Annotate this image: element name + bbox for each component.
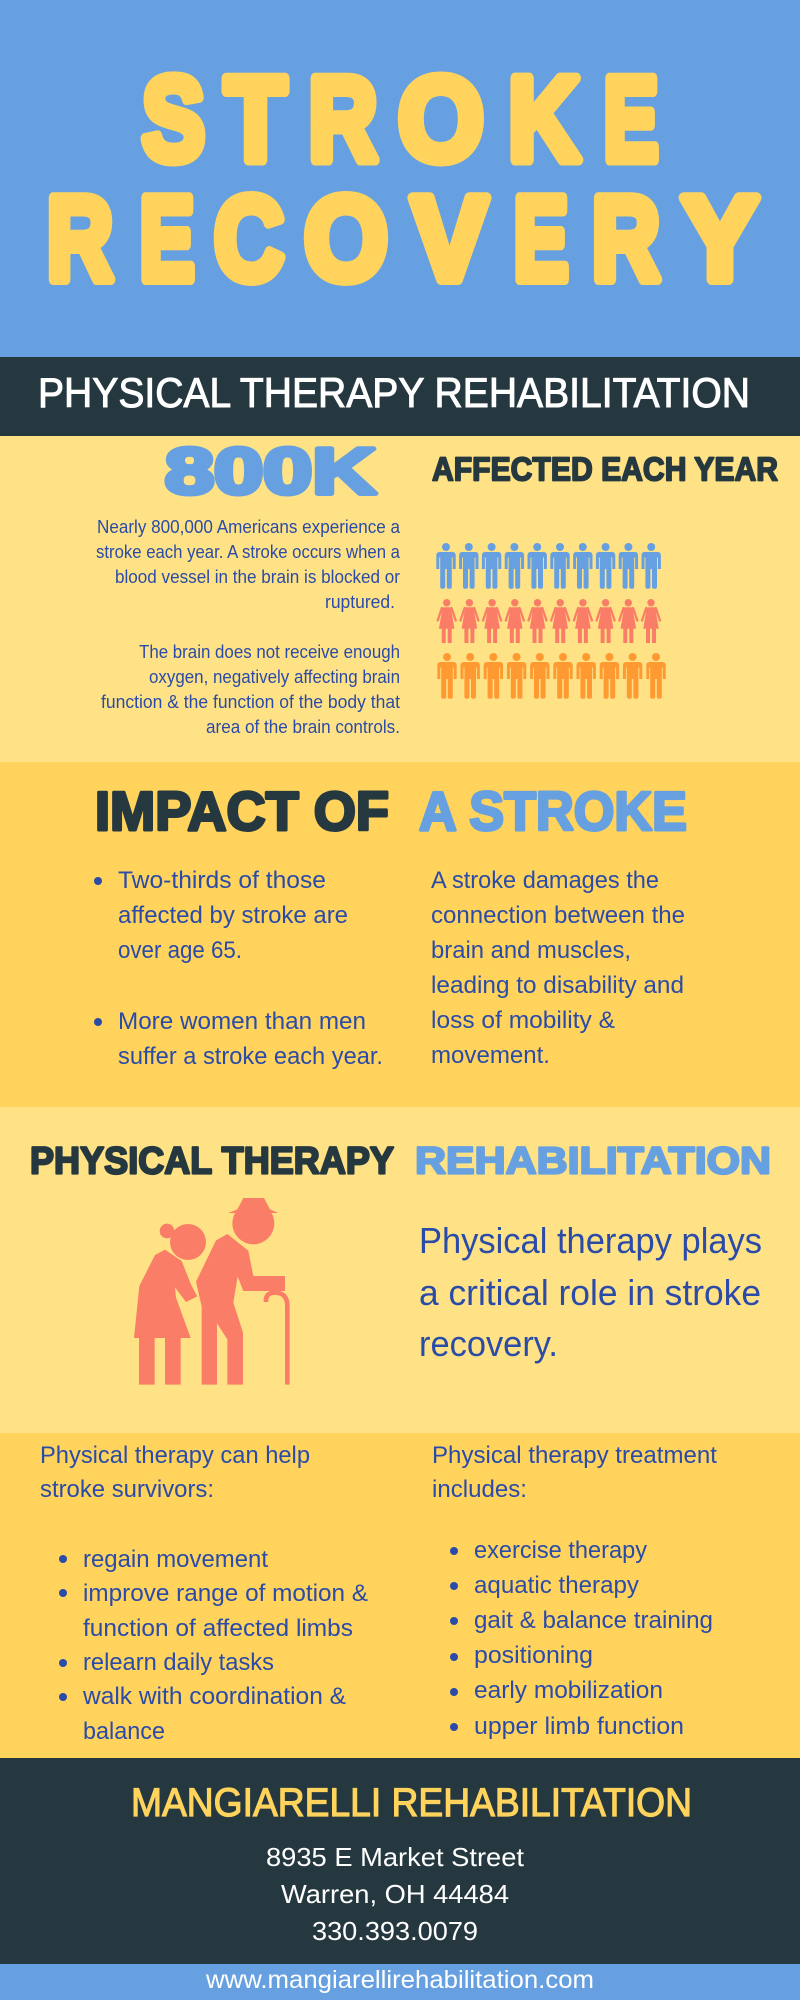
text block: critical role: a critical role in stroke [419,1272,761,1313]
text block: critical role [419,1220,762,1364]
text block: stroke explanation: oxygen, negatively affecting brain [149,667,400,687]
heading: physical therapy: PHYSICAL THERAPY [30,1140,394,1182]
left column: benefits for stroke survivors: balance [83,1718,165,1745]
address and phone: Warren, OH 44484 [281,1879,509,1909]
text block: stroke explanation: ruptured. [325,592,395,612]
title line: STROKE: O [398,54,484,186]
pictogram row: people, orange [437,653,666,699]
text block: stroke damage: loss of mobility & [431,1007,615,1034]
title line: RECOVERY: R [47,172,113,305]
left column: benefits for stroke survivors [40,1442,368,1745]
bullet list: who is affected: over age 65. [118,937,242,964]
title line: RECOVERY: O [304,172,388,305]
title line: STROKE: T [225,54,286,186]
text block: stroke explanation: stroke each year. A stroke occurs when a [96,542,401,562]
address and phone [266,1842,525,1946]
left column: benefits for stroke survivors: function of affected limbs [83,1615,353,1642]
text block: stroke explanation: blood vessel in the brain is blocked or [115,567,400,587]
heading: affected each year: AFFECTED EACH YEAR [432,450,778,488]
heading: a stroke: A STROKE [419,780,687,842]
left column: benefits for stroke survivors: regain movement [83,1546,268,1573]
heading: rehabilitation: REHABILITATION [415,1140,771,1182]
panel: website bar [0,1964,800,2000]
panel: how therapy helps [0,1433,800,1758]
heading: impact of: IMPACT OF [95,780,389,842]
icon: elderly couple with cane [134,1198,287,1385]
text block: stroke damage: leading to disability and [431,972,684,999]
title line: STROKE: K [508,53,580,186]
left column: benefits for stroke survivors: relearn daily tasks [83,1649,274,1676]
right column: treatment list: positioning [474,1642,593,1669]
text block: stroke explanation: function & the function of the body that [101,692,400,712]
title line: RECOVERY: R [592,172,660,305]
title line: RECOVERY: Y [682,171,758,305]
text block: stroke explanation: Nearly 800,000 Americans experience a [97,517,401,537]
text block: stroke damage: movement. [431,1042,550,1069]
text block: stroke damage: connection between the [431,902,685,929]
right column: treatment list: gait & balance training [474,1607,713,1634]
bullet list: who is affected: More women than men [118,1008,366,1035]
right column: treatment list: Physical therapy treatment [432,1442,717,1469]
address and phone: 8935 E Market Street [266,1842,525,1872]
text block: stroke explanation: The brain does not receive enough [139,642,400,662]
title line: RECOVERY: C [214,172,284,305]
text block: stroke damage: A stroke damages the [431,867,659,894]
big number: 800K [165,434,376,508]
text block: stroke explanation [96,517,401,737]
right column: treatment list: upper limb function [474,1713,684,1740]
text block: stroke damage: brain and muscles, [431,937,631,964]
bullet list: who is affected [94,867,383,1070]
left column: benefits for stroke survivors: stroke survivors: [40,1476,214,1503]
panel: physical therapy rehabilitation [0,1107,800,1433]
title line: RECOVERY [47,171,758,305]
title line: RECOVERY: E [140,171,194,305]
right column: treatment list: exercise therapy [474,1537,647,1564]
panel: contact footer [0,1758,800,1964]
bullet list: who is affected: affected by stroke are [118,902,348,929]
panel: impact of a stroke [0,762,800,1107]
left column: benefits for stroke survivors: walk with coordination & [82,1683,346,1710]
bullet list: who is affected: suffer a stroke each year. [118,1043,383,1070]
footer heading: MANGIARELLI REHABILITATION [131,1781,692,1825]
text block: stroke damage [431,867,685,1069]
title line: STROKE: S [142,52,205,186]
website url: www.mangiarellirehabilitation.com [205,1966,594,1994]
pictogram row: men, blue [436,543,661,589]
left column: benefits for stroke survivors: Physical therapy can help [40,1442,310,1469]
right column: treatment list: aquatic therapy [474,1572,639,1599]
text block: critical role: recovery. [419,1323,558,1364]
right column: treatment list: includes: [432,1476,527,1503]
right column: treatment list [432,1442,717,1740]
title line: STROKE: E [604,52,658,186]
text block: critical role: Physical therapy plays [419,1220,762,1261]
address and phone: 330.393.0079 [312,1916,478,1946]
text block: stroke explanation: area of the brain controls. [206,717,400,737]
title line: RECOVERY: E [514,171,568,305]
bullet list: who is affected: Two-thirds of those [118,867,326,894]
title line: STROKE: R [309,52,377,185]
panel: subtitle band [0,357,800,436]
subtitle: PHYSICAL THERAPY REHABILITATION [38,369,750,416]
title line: RECOVERY: V [412,172,487,305]
panel: title banner [0,0,800,357]
panel: 800K affected each year [0,434,800,762]
right column: treatment list: early mobilization [474,1677,663,1704]
pictogram row: women, coral [438,599,660,643]
title line: STROKE [142,52,658,186]
left column: benefits for stroke survivors: improve range of motion & [83,1580,368,1607]
